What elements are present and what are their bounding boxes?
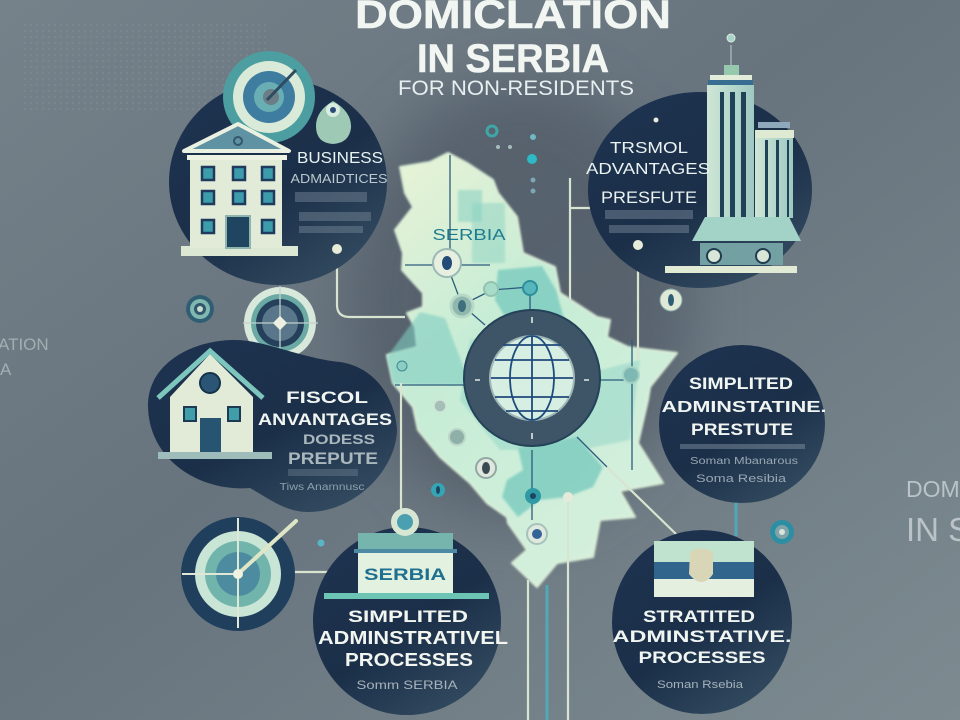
panel heading [586,140,710,207]
shadow glow behind map [350,80,690,520]
ghost text left: A [0,360,12,379]
icon: ring above sign [391,508,419,536]
panel heading [318,607,508,670]
panel heading [662,374,826,439]
decorative small dots [487,126,537,194]
panel heading: ADMAIDTICES [290,171,388,186]
panel heading [290,150,388,186]
icon: house [158,351,272,459]
title: IN SERBIA [417,37,609,81]
title [355,0,671,81]
subtitle: FOR NON-RESIDENTS [398,77,634,100]
ghost text right: DOM [906,476,960,502]
teal connector lines [547,500,736,720]
panel heading: SIMPLITED [348,607,468,626]
panel: tax advantages [586,34,812,311]
panel sub text: PREPUTE [288,449,378,468]
panel fine print [280,469,364,493]
icon: radar dial [181,517,296,631]
panel sub text [288,431,378,468]
icon: small drop [316,101,351,144]
icon: small ring right [770,520,794,544]
icon: towers [665,34,801,273]
panel: stratified administrative processes [612,530,792,714]
map nodes [397,249,639,544]
panel fine print: Soman Mbanarous [690,456,798,467]
panel fine print [295,192,371,233]
panel heading: STRATITED [643,607,755,626]
ghost text right [906,476,960,548]
dotted texture [20,20,270,110]
panel heading [612,607,792,667]
map label: SERBIA [432,227,506,244]
panel fine print [680,444,805,485]
panel: simplified administrative pressure [659,345,826,503]
panel heading: BUSINESS [297,150,383,167]
icon: small ring left [186,295,214,323]
panel heading: PRESFUTE [601,188,697,207]
panel: simplified administrative processes [313,527,508,715]
panel fine print: Tiws Anamnusc [280,482,364,493]
panel: fiscal advantages [148,340,397,512]
panel heading: ADVANTAGES [586,161,710,178]
map connector lines [395,155,632,520]
panel heading: SIMPLITED [689,374,793,393]
panel heading: PROCESSES [638,648,766,667]
icon: bank building [181,124,298,256]
panel heading: PROCESSES [345,650,473,670]
panel fine print: Soman Rsebia [657,679,744,691]
panel heading: ANVANTAGES [258,410,392,429]
globe emblem [464,310,600,446]
cream node on map [563,492,573,502]
map teal regions [387,190,640,517]
panel heading: PRESTUTE [691,420,793,439]
panel: business advantages [169,51,388,285]
icon: flag [654,541,754,597]
map of Serbia [387,153,677,587]
panel fine print: Soma Resibia [696,473,787,485]
panel fine print [605,210,693,233]
icon: compass dial left [243,286,318,360]
ghost text left [0,335,49,379]
icon: serbia sign: SERBIA [364,565,446,584]
panel heading: ADMINSTRATIVEL [318,628,508,648]
panel fine print: Somm SERBIA [356,678,458,692]
icon: target dial [223,51,315,143]
icon: serbia sign [324,533,489,599]
connector lines [280,178,677,720]
icon: small teal dot [318,540,324,546]
panel heading: TRSMOL [610,140,688,157]
panel heading: FISCOL [286,388,368,407]
panel heading [258,388,392,429]
panel heading: ADMINSTATIVE. [612,627,792,646]
panel sub text: DODESS [303,431,375,447]
panel heading: ADMINSTATINE. [662,399,826,416]
